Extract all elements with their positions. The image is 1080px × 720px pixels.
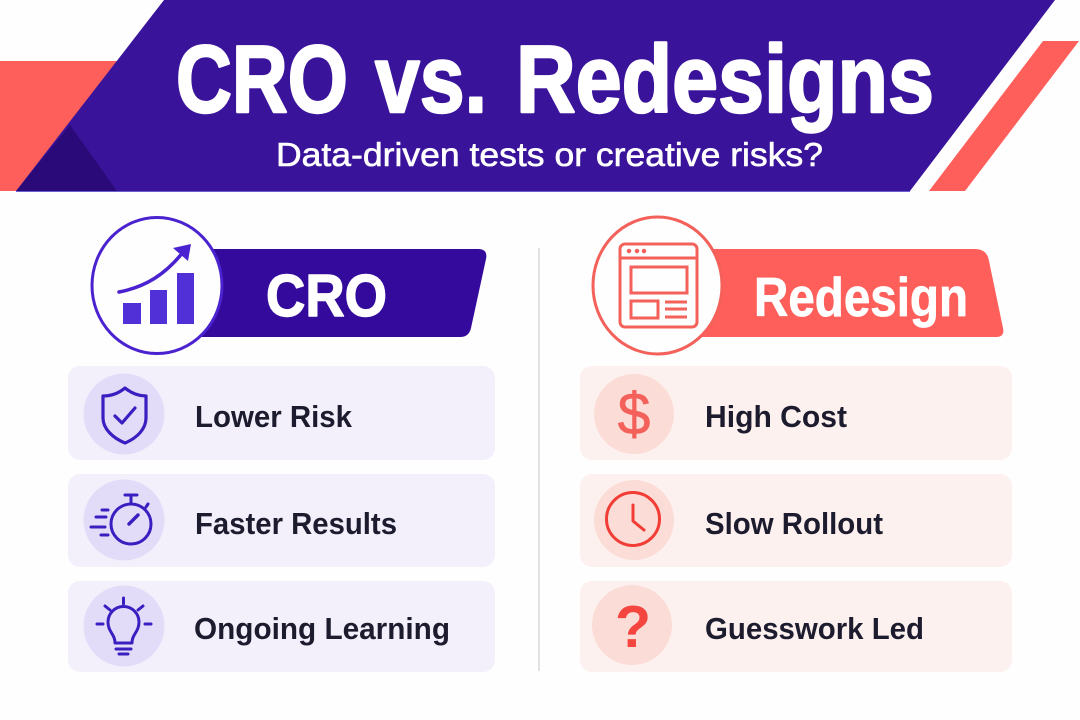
Redesign heading badge <box>593 217 1003 354</box>
icon: stopwatch <box>91 495 151 544</box>
icon: dollar sign: $ <box>618 381 650 447</box>
label: Ongoing Learning <box>194 611 450 646</box>
item: Ongoing Learning <box>68 581 495 672</box>
main purple banner <box>16 0 1055 191</box>
title: vs. <box>375 26 487 133</box>
item: High Cost <box>580 366 1012 460</box>
title: CRO <box>176 26 348 133</box>
subtitle: Data-driven tests or creative risks? <box>276 136 823 173</box>
icon: clock <box>606 492 660 546</box>
item: Slow Rollout <box>580 474 1012 567</box>
header banner <box>0 0 1079 191</box>
title <box>176 26 934 133</box>
label: Lower Risk <box>195 399 353 434</box>
icon: question mark: ? <box>615 594 651 660</box>
title: Redesigns <box>516 26 934 133</box>
item: Guesswork Led <box>580 581 1012 672</box>
item: Faster Results <box>68 474 495 567</box>
Redesign label: Redesign <box>754 266 968 328</box>
CRO heading badge <box>92 218 486 354</box>
label: Slow Rollout <box>705 506 883 541</box>
icon: rising bar chart <box>119 244 194 324</box>
panel: Redesign column <box>580 217 1012 672</box>
CRO label: CRO <box>266 263 387 329</box>
dark corner triangle <box>16 125 117 191</box>
item: Lower Risk <box>68 366 495 460</box>
label: High Cost <box>705 399 847 434</box>
left coral accent <box>0 61 119 191</box>
label: Guesswork Led <box>705 611 924 646</box>
panel: CRO column <box>68 218 495 672</box>
right coral stripe <box>929 41 1079 191</box>
icon: shield <box>103 388 146 443</box>
icon: lightbulb <box>97 598 151 654</box>
icon: browser window <box>620 244 697 327</box>
label: Faster Results <box>195 506 397 541</box>
